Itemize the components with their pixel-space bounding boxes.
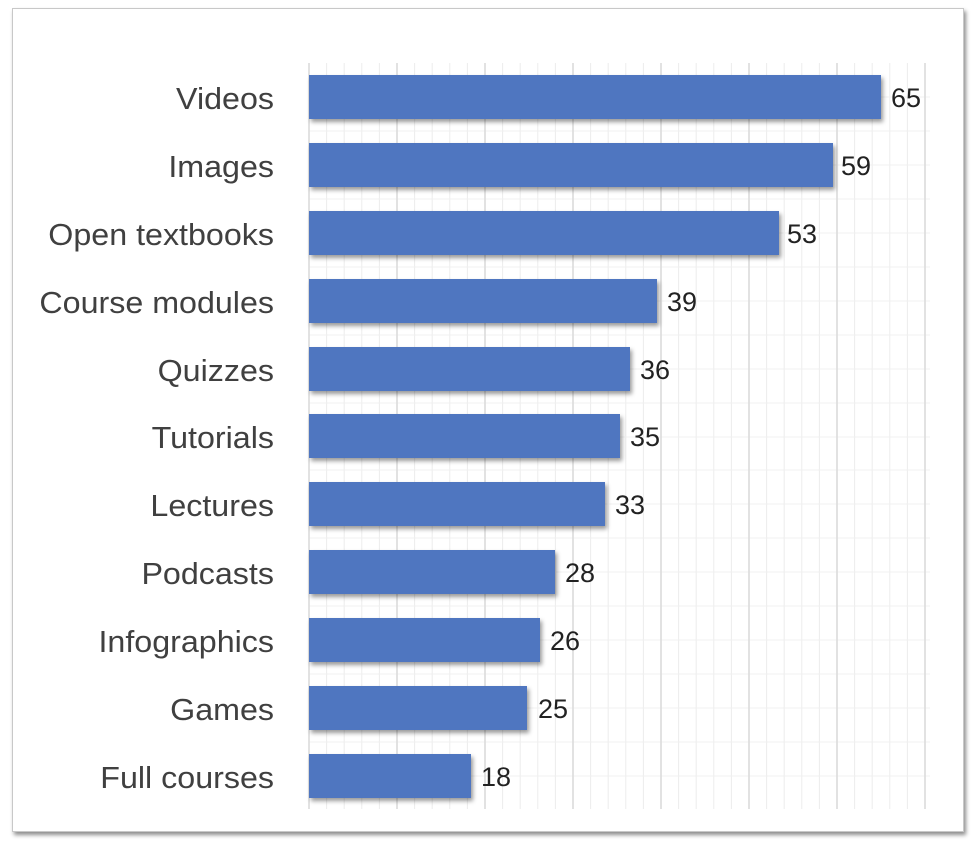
category labels: Lectures xyxy=(150,488,274,523)
value labels: 39 xyxy=(667,287,697,317)
value labels: 26 xyxy=(550,626,580,656)
category labels: Infographics xyxy=(98,624,274,659)
category labels: Images xyxy=(168,149,274,184)
value labels xyxy=(481,83,921,792)
value labels: 53 xyxy=(787,219,817,249)
category labels xyxy=(39,81,274,795)
value labels: 35 xyxy=(630,422,660,452)
value labels: 33 xyxy=(615,490,645,520)
value labels: 36 xyxy=(640,355,670,385)
category labels: Podcasts xyxy=(141,556,274,591)
category labels: Open textbooks xyxy=(48,217,274,252)
value labels: 65 xyxy=(891,83,921,113)
category labels: Full courses xyxy=(100,760,274,795)
category labels: Games xyxy=(170,692,274,727)
value labels: 59 xyxy=(841,151,871,181)
value labels: 28 xyxy=(565,558,595,588)
category labels: Quizzes xyxy=(158,353,274,388)
category labels: Tutorials xyxy=(152,420,274,455)
category labels: Videos xyxy=(176,81,274,116)
value labels: 25 xyxy=(538,694,568,724)
category labels: Course modules xyxy=(39,285,274,320)
value labels: 18 xyxy=(481,762,511,792)
